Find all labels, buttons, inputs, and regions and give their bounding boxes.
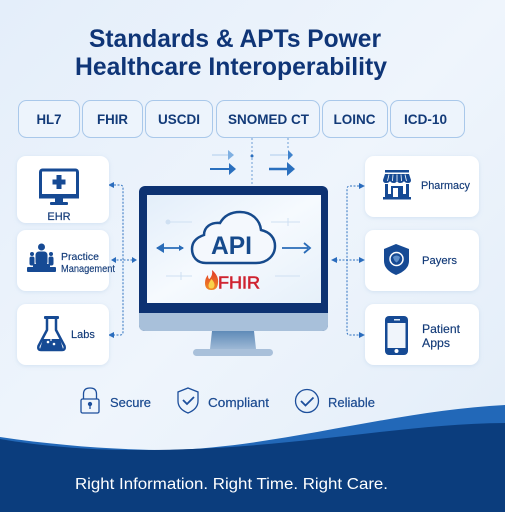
connectors right [331, 183, 365, 338]
monitor [139, 186, 328, 356]
connectors left [108, 182, 137, 338]
card: EHR [17, 156, 109, 223]
card: Labs: Labs [71, 329, 95, 341]
card: Payers [365, 230, 479, 291]
card: Pharmacy: Pharmacy [421, 180, 470, 192]
card: Practice Management: Management [61, 263, 115, 275]
standards pills row: SNOMED CT [228, 112, 310, 127]
cloud [192, 212, 275, 263]
icon: check circle [296, 390, 318, 412]
icon: storefront [383, 170, 411, 200]
benefit: Compliant: Compliant [208, 395, 269, 410]
icon: shield [384, 244, 409, 275]
icon: monitor with plus [39, 170, 79, 205]
left double arrow [157, 247, 183, 249]
card: EHR: EHR [47, 211, 71, 223]
card: Labs [17, 304, 109, 365]
API text: API [211, 232, 252, 260]
monitor chin [139, 313, 328, 331]
icon: shield check [178, 388, 198, 413]
arrows from standards to API [210, 138, 295, 186]
benefit: Secure: Secure [110, 395, 151, 410]
monitor stand [210, 331, 256, 349]
footer tagline: Right Information. Right Time. Right Care. [75, 476, 388, 493]
icon: padlock [81, 388, 99, 413]
benefit: Secure [81, 388, 151, 413]
card: Patient Apps: Apps [422, 336, 450, 350]
card: Patient Apps [365, 304, 479, 365]
faint background lines [166, 218, 300, 280]
FHIR logo: FHIR [218, 272, 260, 292]
benefit: Compliant [178, 388, 269, 413]
monitor base [193, 349, 273, 356]
standards pills row: ICD-10 [404, 112, 447, 127]
standards pills row: USCDI [158, 112, 200, 127]
standards pills row: HL7 [36, 112, 62, 127]
card: Payers: Payers [422, 255, 457, 267]
monitor screen [147, 195, 321, 303]
monitor body [139, 186, 328, 331]
title [75, 25, 387, 81]
card: Patient Apps: Patient [422, 322, 461, 336]
footer wave [0, 405, 505, 512]
benefit: Reliable: Reliable [328, 395, 375, 410]
card: Pharmacy [365, 156, 479, 217]
card: Practice Management [17, 230, 115, 291]
icon: smartphone [385, 316, 408, 355]
right arrow [282, 243, 310, 253]
FHIR logo [205, 270, 260, 292]
title: Healthcare Interoperability [75, 53, 387, 81]
icon: people at desk [27, 244, 56, 272]
title: Standards & APTs Power [89, 25, 381, 53]
standards pills row: LOINC [334, 112, 376, 127]
standards pills row [18, 100, 464, 138]
benefit: Reliable [296, 390, 375, 412]
icon: flask [38, 316, 65, 350]
card: Practice Management: Practice [61, 251, 99, 263]
standards pills row: FHIR [97, 112, 128, 127]
